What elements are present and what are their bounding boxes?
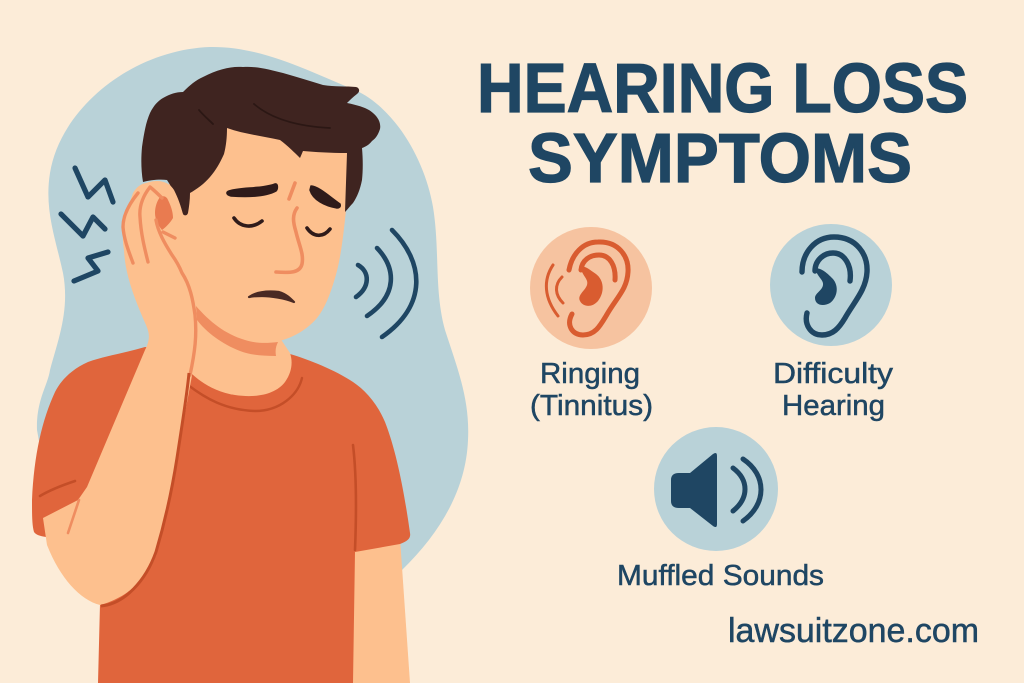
- symptom: difficulty hearing: [770, 224, 894, 422]
- hand: [43, 181, 197, 605]
- background blob: [37, 47, 468, 600]
- icon: sound waves: [356, 230, 416, 337]
- label: hearing: Hearing: [782, 390, 885, 422]
- ear canal: [155, 196, 173, 230]
- symptom: muffled sounds: [617, 427, 824, 592]
- icon: zigzag noise lines: [61, 168, 113, 281]
- label: muffled sounds: Muffled Sounds: [617, 560, 824, 592]
- label: ringing: Ringing: [540, 358, 640, 390]
- symptom: ringing: [530, 227, 653, 422]
- chin shadow: [196, 306, 278, 356]
- elbow line: [68, 500, 79, 533]
- finger lines: [123, 187, 196, 375]
- nose: [276, 183, 302, 272]
- label: difficulty: Difficulty: [773, 358, 894, 390]
- title: SYMPTOMS: [528, 119, 912, 197]
- hair strands: [199, 104, 330, 128]
- arm shadow line: [101, 373, 189, 606]
- right arm: [352, 538, 410, 683]
- face: [160, 125, 350, 343]
- left eyebrow: [227, 184, 277, 196]
- illustration: man holding ear: [32, 67, 410, 683]
- collar seam: [188, 378, 302, 411]
- title: HEARING LOSS: [477, 49, 968, 127]
- icon: ear with ringing: [530, 227, 652, 349]
- neck: [190, 305, 292, 396]
- eyes: [234, 218, 330, 235]
- sleeve seams: [40, 445, 356, 550]
- right eyebrow: [310, 186, 340, 208]
- label: tinnitus: (Tinnitus): [530, 390, 653, 422]
- mouth: [249, 292, 294, 302]
- icon: ear: [770, 224, 892, 346]
- website address: lawsuitzone.com: [728, 612, 979, 650]
- t-shirt: [32, 347, 410, 683]
- icon: speaker: [654, 427, 778, 551]
- title: [477, 49, 968, 197]
- hair: [141, 67, 380, 215]
